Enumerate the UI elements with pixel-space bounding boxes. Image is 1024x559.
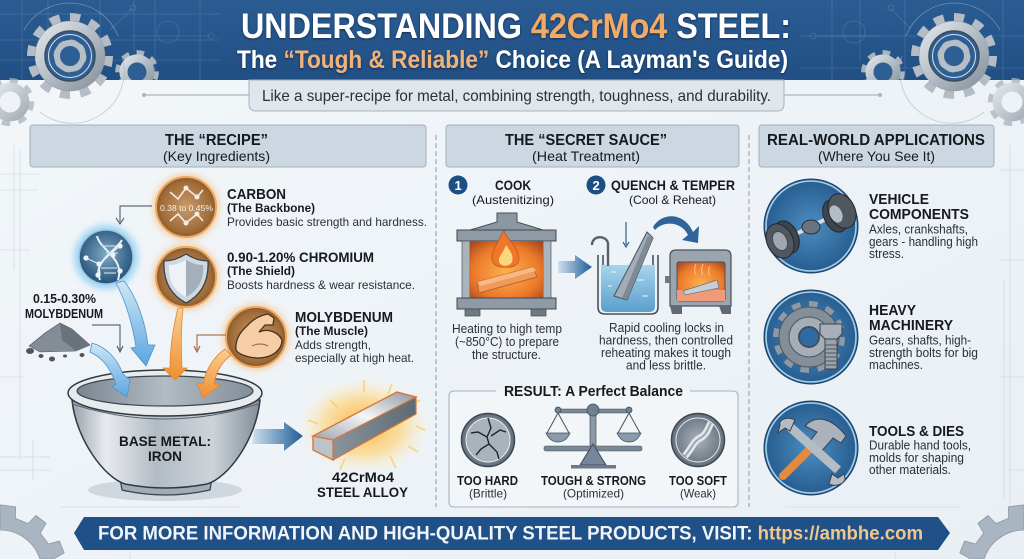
icon: powder pile <box>26 323 90 362</box>
text: quench description <box>599 321 733 372</box>
step 2: quench and temper <box>586 176 735 372</box>
label: too soft: (Weak) <box>680 486 716 500</box>
text: quench description: hardness, then controlled <box>599 334 733 348</box>
text: vehicle components: gears - handling high <box>869 235 978 249</box>
heading: the recipe: THE “RECIPE” <box>165 132 268 149</box>
text: chromium: 0.90-1.20% CHROMIUM <box>227 249 374 265</box>
label: molybdenum powder: 0.15-0.30% <box>33 292 96 306</box>
icon: too hard cracked dial <box>462 414 514 466</box>
heading: the secret sauce: THE “SECRET SAUCE” <box>505 132 667 149</box>
icon: muscle badge <box>223 304 289 370</box>
title: The “Tough & Reliable” Choice (A Layman's Guide) <box>237 46 788 74</box>
text: heavy machinery: Gears, shafts, high- <box>869 334 971 348</box>
badge: step 1 <box>448 176 468 194</box>
label: too hard <box>457 473 518 500</box>
title <box>237 7 791 74</box>
application: heavy machinery <box>764 290 978 384</box>
step 1: cook <box>448 176 562 362</box>
arrow: powder to bowl <box>90 343 130 397</box>
divider lines <box>436 135 749 507</box>
heading: cook: (Austenitizing) <box>472 193 554 207</box>
text: molybdenum: especially at high heat. <box>295 351 414 365</box>
label: steel alloy: STEEL ALLOY <box>317 484 409 500</box>
text: cook description: (~850°C) to prepare <box>455 335 559 349</box>
icon: axle <box>761 179 861 273</box>
gear: bottom right <box>960 505 1024 559</box>
label: too hard: TOO HARD <box>457 473 518 488</box>
text: tools and dies: other materials. <box>869 463 951 477</box>
icon: furnace <box>457 213 556 316</box>
header band <box>0 0 1024 80</box>
text: cook description: Heating to high temp <box>452 322 562 336</box>
text: heavy machinery: machines. <box>869 358 923 372</box>
panel: result <box>449 383 738 507</box>
text: heavy machinery: strength bolts for big <box>869 346 978 360</box>
subtitle pill <box>142 80 882 111</box>
panel: real-world applications <box>759 125 994 495</box>
label: base metal iron: IRON <box>148 448 182 464</box>
heading: applications: (Where You See It) <box>818 148 935 164</box>
icon: carbon molecule badge <box>153 174 219 240</box>
application: vehicle components <box>761 179 978 273</box>
icon: shield badge <box>153 244 219 310</box>
text: tools and dies: Durable hand tools, <box>869 438 971 452</box>
label: tough and strong: TOUGH & STRONG <box>541 473 646 488</box>
heading: applications <box>759 125 994 167</box>
icon: too soft bent bar <box>672 414 724 466</box>
heading: the recipe: (Key Ingredients) <box>163 148 270 164</box>
arrow: cook to quench <box>558 255 592 279</box>
gear cluster: top right <box>864 3 1024 123</box>
icon: base metal bowl <box>68 370 262 501</box>
label: steel alloy <box>317 469 409 500</box>
text: chromium: Boosts hardness & wear resistance. <box>227 278 415 292</box>
text: tools and dies: molds for shaping <box>869 451 964 465</box>
text: carbon: CARBON <box>227 186 286 203</box>
icon: tempering oven <box>665 250 731 314</box>
label: too hard: (Brittle) <box>469 486 507 500</box>
label: tough and strong: (Optimized) <box>563 486 624 500</box>
ingredient: chromium <box>153 244 415 310</box>
text: molybdenum: Adds strength, <box>295 338 371 352</box>
text: vehicle components: Axles, crankshafts, <box>869 222 968 236</box>
badge: step 1: 1 <box>454 178 462 193</box>
arrow: molybdenum to bowl <box>197 349 231 398</box>
arrow: bowl to alloy <box>252 422 303 451</box>
footer banner <box>74 517 950 550</box>
label: too soft: TOO SOFT <box>669 473 727 488</box>
text: molybdenum <box>295 309 414 365</box>
text: quench description: Rapid cooling locks in <box>609 321 724 335</box>
heading: cook <box>472 177 554 207</box>
ingredient: molybdenum <box>223 304 414 370</box>
panel: the secret sauce <box>0 125 1024 559</box>
text: vehicle components: VEHICLE <box>869 191 929 208</box>
badge: step 2 <box>586 176 606 194</box>
icon: dna badge <box>74 225 138 289</box>
text: vehicle components: COMPONENTS <box>869 206 969 223</box>
label: too soft <box>669 473 727 500</box>
label: base metal iron: BASE METAL: <box>119 433 211 449</box>
heading: the secret sauce: (Heat Treatment) <box>532 148 640 164</box>
title: UNDERSTANDING 42CrMo4 STEEL: <box>241 7 791 46</box>
text: tools and dies: TOOLS & DIES <box>869 423 964 440</box>
icon: gear and bolt <box>764 290 858 384</box>
badge: step 2: 2 <box>592 178 600 193</box>
heading: quench and temper: (Cool & Reheat) <box>629 193 716 207</box>
heading: the recipe <box>30 125 426 167</box>
text: carbon: (The Backbone) <box>227 201 315 215</box>
footer banner: FOR MORE INFORMATION AND HIGH-QUALITY STEEL PRODUCTS, VISIT: https://ambhe.com <box>98 524 923 544</box>
gear cluster: top left <box>0 3 156 123</box>
gear: bottom left <box>0 505 64 559</box>
icon: wrench and hammer <box>764 401 858 495</box>
text: vehicle components: stress. <box>869 247 904 261</box>
label: tough and strong <box>541 473 646 500</box>
icon: carbon molecule badge: 0.38 to 0.45% <box>160 203 213 213</box>
text: carbon <box>227 186 427 229</box>
text: heavy machinery: HEAVY <box>869 302 916 319</box>
heading: quench and temper <box>611 177 735 207</box>
ingredient: carbon <box>153 174 427 240</box>
text: cook description: the structure. <box>472 348 541 362</box>
text: vehicle components <box>869 191 978 261</box>
text: quench description: reheating makes it tough <box>601 346 731 360</box>
text: molybdenum: MOLYBDENUM <box>295 309 393 326</box>
heading: cook: COOK <box>495 177 531 193</box>
application: tools and dies <box>764 401 971 495</box>
heading: quench and temper: QUENCH & TEMPER <box>611 177 735 193</box>
text: cook description <box>452 322 562 362</box>
arrow: chromium to bowl <box>163 308 187 380</box>
heading: applications: REAL-WORLD APPLICATIONS <box>767 132 985 149</box>
text: heavy machinery: MACHINERY <box>869 317 953 334</box>
label: base metal iron <box>119 433 211 464</box>
text: tools and dies <box>869 423 971 477</box>
subtitle pill: Like a super-recipe for metal, combining strength, toughness, and durability. <box>262 88 771 105</box>
heading: result: RESULT: A Perfect Balance <box>504 383 683 400</box>
text: chromium: (The Shield) <box>227 264 295 278</box>
text: chromium <box>227 249 415 292</box>
icon: steel alloy bar <box>298 378 430 474</box>
text: quench description: and less brittle. <box>626 358 706 372</box>
text: heavy machinery <box>869 302 978 372</box>
panel: the recipe <box>25 125 430 501</box>
arrow: quench to reheat <box>653 216 699 243</box>
heading: the secret sauce <box>446 125 739 167</box>
label: steel alloy: 42CrMo4 <box>332 469 394 485</box>
icon: quench tank <box>592 222 658 314</box>
label: molybdenum powder: MOLYBDENUM <box>25 307 103 321</box>
icon: balance scale <box>544 404 642 468</box>
text: molybdenum: (The Muscle) <box>295 324 368 338</box>
label: molybdenum powder <box>25 292 103 321</box>
arrow: dna to bowl <box>116 281 155 366</box>
connector arrows: thin <box>92 206 226 352</box>
text: carbon: Provides basic strength and hardness. <box>227 215 427 229</box>
